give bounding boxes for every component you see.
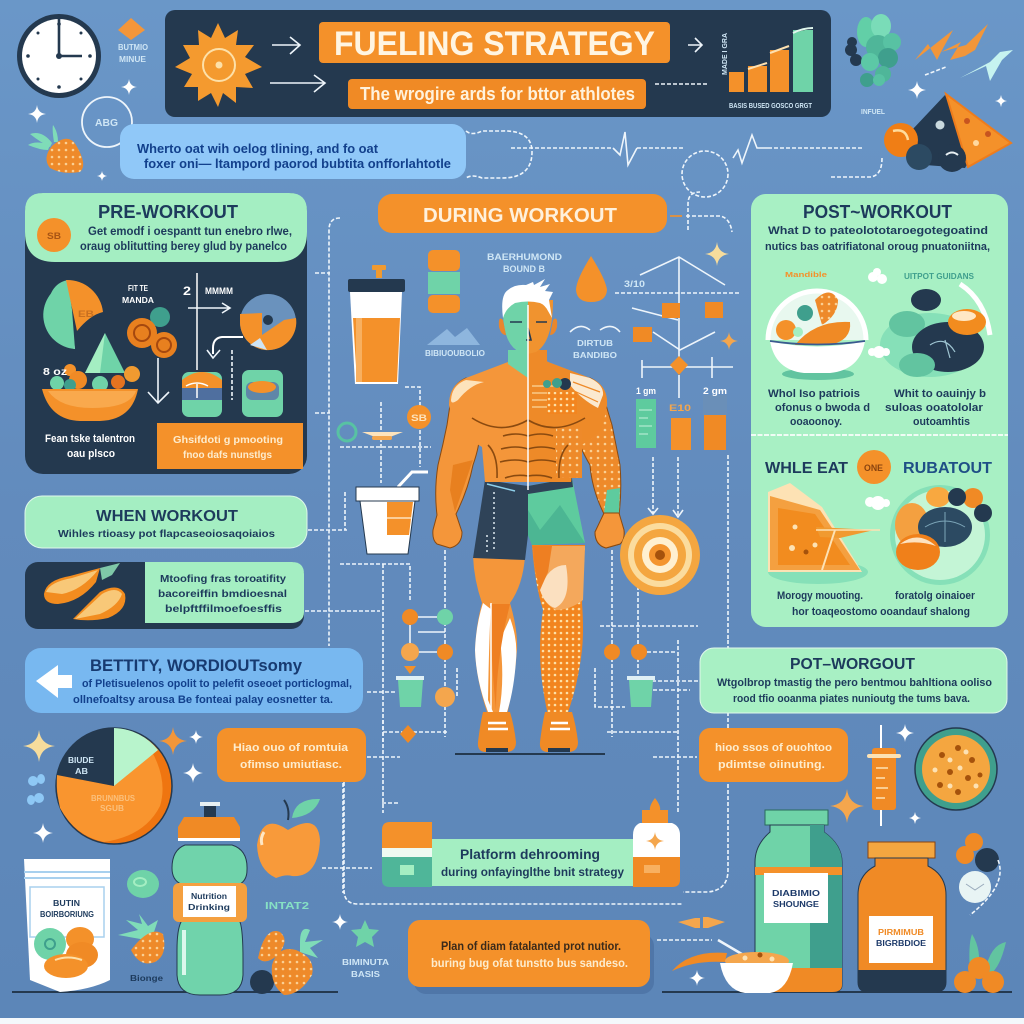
pie chart: BIUDE xyxy=(68,756,95,765)
panel: during workout pill xyxy=(378,194,667,233)
bowl xyxy=(768,270,866,380)
icon: green jar xyxy=(755,810,842,992)
bottom white strip xyxy=(0,1018,1024,1024)
sub heading xyxy=(765,450,992,484)
panel: pre-workout xyxy=(25,193,307,474)
captions: ooaoonoy. xyxy=(790,416,842,428)
heading: What D to pateolototaroegotegoatind xyxy=(768,225,988,237)
sub heading: WHLE EAT xyxy=(765,460,848,477)
icon: cereal bowl xyxy=(672,917,793,993)
orange note left: Hiao ouo of romtuia xyxy=(233,742,349,754)
top center label: BOUND B xyxy=(503,264,545,274)
bar chart: MADE I GRA xyxy=(722,33,729,75)
panel header: SB xyxy=(47,231,62,241)
mini bar chart: 2 gm xyxy=(703,386,727,396)
coins and arrow: FIT TE xyxy=(128,284,149,293)
icon: berries and circle xyxy=(956,833,1000,915)
sub heading: RUBATOUT xyxy=(903,460,992,477)
bottom center banner: during onfayinglthe bnit strategy xyxy=(441,867,625,879)
panel header: Get emodf i oespantt tun enebro rlwe, xyxy=(88,226,292,238)
plate group: UITPOT GUIDANS xyxy=(904,272,975,281)
icon: pouch xyxy=(24,859,110,992)
timing label xyxy=(118,18,148,64)
circle label: ABG xyxy=(95,118,118,129)
heading: POST~WORKOUT xyxy=(803,202,952,222)
panel: before workout: ollnefoaltsy arousa Be fonteai palay eosnetter ta. xyxy=(73,694,333,706)
timeline xyxy=(183,273,243,400)
jars xyxy=(182,370,283,417)
plate group xyxy=(880,272,990,377)
icon: water bottle xyxy=(172,802,247,995)
panel: snack note: bacoreiffin bmdioesnal xyxy=(158,588,287,600)
icon: cup with straw xyxy=(356,472,428,554)
orange note right: hioo ssos of ouohtoo xyxy=(715,742,832,754)
left leg xyxy=(473,556,525,715)
top center label xyxy=(487,252,563,274)
saucer and swirl xyxy=(338,405,431,441)
intro callout xyxy=(120,124,466,179)
icon: star xyxy=(342,920,389,979)
captions: suloas ooatololar xyxy=(885,402,984,414)
small label top right: INFUEL xyxy=(861,109,886,116)
bottom captions xyxy=(777,590,976,618)
orange note right: pdimtse oiinuting. xyxy=(718,759,825,771)
neck xyxy=(508,350,528,378)
icon: cheese wedge xyxy=(768,483,880,584)
panel header: PRE-WORKOUT xyxy=(98,202,238,222)
icon: snack bowl xyxy=(915,728,997,810)
torso xyxy=(449,352,607,482)
center line xyxy=(491,305,528,710)
subtitle: The wrogire ards for bttor athlotes xyxy=(360,84,635,104)
mini bar chart: E10 xyxy=(669,403,691,413)
timeline: 2 xyxy=(183,284,191,298)
icon: lightning bolts xyxy=(915,24,1013,81)
icon: fruit top left xyxy=(28,125,83,173)
network nodes xyxy=(396,609,655,743)
right network labels: DIRTUB xyxy=(577,339,613,348)
captions: outoamhtis xyxy=(913,416,970,428)
panel: before workout xyxy=(25,648,363,713)
icon: wedge and balls xyxy=(884,94,1011,172)
icon: oranges and leaves xyxy=(954,934,1006,993)
icon: water bottle: Nutrition xyxy=(191,892,227,901)
icon: pouch: BUTIN xyxy=(53,899,80,908)
right leg xyxy=(532,545,585,715)
icon: drop xyxy=(576,256,607,302)
bowl: 8 oz xyxy=(43,367,67,378)
icon: fruit left xyxy=(118,914,164,983)
panel: before workout: BETTITY, WORDIOUTsomy xyxy=(90,656,303,675)
orange note: fnoo dafs nunstlgs xyxy=(183,449,272,461)
icon: orange jar: BIGRBDIOE xyxy=(876,939,927,948)
icon: shaker bottle xyxy=(348,265,405,384)
icon: capsule stack xyxy=(428,250,460,313)
right arm xyxy=(576,378,624,548)
decorative stars xyxy=(23,242,864,823)
bottom captions: Morogy mouoting. xyxy=(777,590,863,602)
panel: snack note: belpftffilmoefoesffis xyxy=(165,603,282,615)
panel header: oraug oblitutting berey glud by panelco xyxy=(80,241,287,253)
icon: pouch: BOIRBORIUNG xyxy=(40,910,94,919)
intro callout: Wherto oat wih oelog tlining, and fo oat xyxy=(137,142,379,156)
panel: when workout: Wihles rtioasy pot flapcaseoiosaqoiaios xyxy=(58,528,275,540)
fruit label: INTAT2 xyxy=(265,901,310,912)
icon: star: BIMINUTA xyxy=(342,957,389,967)
mini bar chart xyxy=(636,386,727,450)
pie chart xyxy=(56,728,172,844)
orange note left: ofimso umiutiasc. xyxy=(240,759,342,771)
icon: carrots xyxy=(44,563,125,620)
captions xyxy=(768,388,986,428)
bowl xyxy=(42,333,140,421)
header banner xyxy=(165,10,831,117)
heading: nutics bas oatrifiatonal oroug pnuatoniitna, xyxy=(765,241,990,253)
person figure xyxy=(433,279,624,754)
circle label xyxy=(82,97,132,147)
top center label: BAERHUMOND xyxy=(487,252,563,262)
captions: Whol Iso patriois xyxy=(768,388,860,400)
right network labels xyxy=(573,279,738,375)
pie chart: AB xyxy=(75,767,88,776)
panel: when workout: WHEN WORKOUT xyxy=(96,508,238,525)
icon: apple xyxy=(257,799,320,878)
captions: ofonus o bwoda d xyxy=(775,402,870,414)
intro callout: foxer oni— ltampord paorod bubtita onfforlahtotle xyxy=(144,157,451,171)
target xyxy=(620,515,700,595)
coins and arrow xyxy=(122,284,177,403)
saucer and swirl: SB xyxy=(411,413,428,423)
icon: fruit plate xyxy=(890,485,992,585)
bar chart xyxy=(722,28,813,110)
timing label: BUTMIO xyxy=(118,43,148,52)
icon: water bottle: Drinking xyxy=(188,903,230,912)
icon: green jar: DIABIMIO xyxy=(772,889,820,898)
pie chart: BRUNNBUS xyxy=(91,794,136,803)
title: FUELING STRATEGY xyxy=(334,25,655,63)
panel header xyxy=(25,193,307,262)
shoes xyxy=(478,712,516,752)
bottom center banner: Platform dehrooming xyxy=(460,847,600,862)
panel: snack note xyxy=(25,562,304,629)
panel: snack note: Mtoofing fras toroatifity xyxy=(160,573,286,585)
icon: mountains xyxy=(425,328,485,358)
icon: green coin xyxy=(127,870,159,898)
icon: clock xyxy=(17,14,101,98)
pie: EB xyxy=(78,309,95,319)
panel: during workout pill: DURING WORKOUT xyxy=(423,205,617,227)
right network labels: BANDIBO xyxy=(573,351,617,360)
shorts xyxy=(473,480,528,560)
icon: back arrow xyxy=(36,665,72,698)
panel: post-workout xyxy=(751,194,1008,627)
bar chart: BASIS BUSED GOSCO GRGT xyxy=(729,103,813,110)
ground line right xyxy=(662,991,1012,993)
timing label: MINUE xyxy=(119,55,147,64)
left arm xyxy=(433,378,480,548)
bowl: Mandible xyxy=(785,270,827,279)
icon: sun xyxy=(175,23,262,107)
icon: green jar: SHOUNGE xyxy=(773,900,820,909)
icon: fruit left: Bionge xyxy=(130,974,164,983)
right bottle xyxy=(633,798,680,887)
ground line left xyxy=(12,991,338,993)
circle gauge xyxy=(240,294,296,350)
small blobs xyxy=(865,268,890,510)
divider xyxy=(751,434,1008,436)
heading xyxy=(765,202,990,253)
bottom captions: hor toaqeostomo ooandauf shalong xyxy=(792,606,970,618)
orange note right xyxy=(699,728,848,782)
icon: star: BASIS xyxy=(351,969,380,979)
bottom captions: foratolg oinaioer xyxy=(895,590,976,602)
arrows xyxy=(270,37,702,92)
caption: Fean tske talentron xyxy=(45,433,135,445)
icon: orange jar: PIRMIMUB xyxy=(878,928,924,937)
panel: post workout small: rood tfio ooanma piates nunioutg the tums bava. xyxy=(733,693,970,705)
icon: grapes xyxy=(845,14,901,87)
orange note left xyxy=(217,728,366,782)
bottom center note: Plan of diam fatalanted prot nutior. xyxy=(441,941,621,953)
bottom center note: buring bug ofat tunstto bus sandeso. xyxy=(431,958,628,970)
panel: post workout small: Wtgolbrop tmastig the pero bentmou bahltiona ooliso xyxy=(717,677,992,689)
captions: Whit to oauinjy b xyxy=(894,388,986,400)
icon: fruit cluster xyxy=(250,929,323,995)
subtitle xyxy=(348,79,646,109)
right network labels: 3/10 xyxy=(624,279,645,289)
sub heading: ONE xyxy=(864,463,883,473)
orange note xyxy=(157,423,303,469)
mini bar chart: 1 gm xyxy=(636,386,656,396)
caption xyxy=(45,433,135,460)
icon: syringe xyxy=(867,725,901,826)
timeline: MMMM xyxy=(205,286,233,296)
panel: post workout small: POT–WORGOUT xyxy=(790,656,915,673)
panel: before workout: of Pletisuelenos opolit to pelefit oseoet porticlogmal, xyxy=(82,678,352,690)
coins and arrow: MANDA xyxy=(122,296,154,305)
orange note: Ghsifdoti g pmooting xyxy=(173,434,283,446)
head xyxy=(503,300,528,354)
connector lines xyxy=(305,131,882,940)
icon: mountains: BIBIUOUBOLIO xyxy=(425,349,485,358)
pie chart: SGUB xyxy=(100,804,124,813)
bottom center note xyxy=(408,920,654,994)
icon: orange jar xyxy=(858,842,946,992)
bottom center banner xyxy=(382,798,680,887)
caption: oau plsco xyxy=(67,448,115,460)
left box xyxy=(382,822,432,887)
pie xyxy=(43,280,103,349)
panel: post workout small xyxy=(700,648,1007,713)
panel: when workout xyxy=(25,496,307,548)
